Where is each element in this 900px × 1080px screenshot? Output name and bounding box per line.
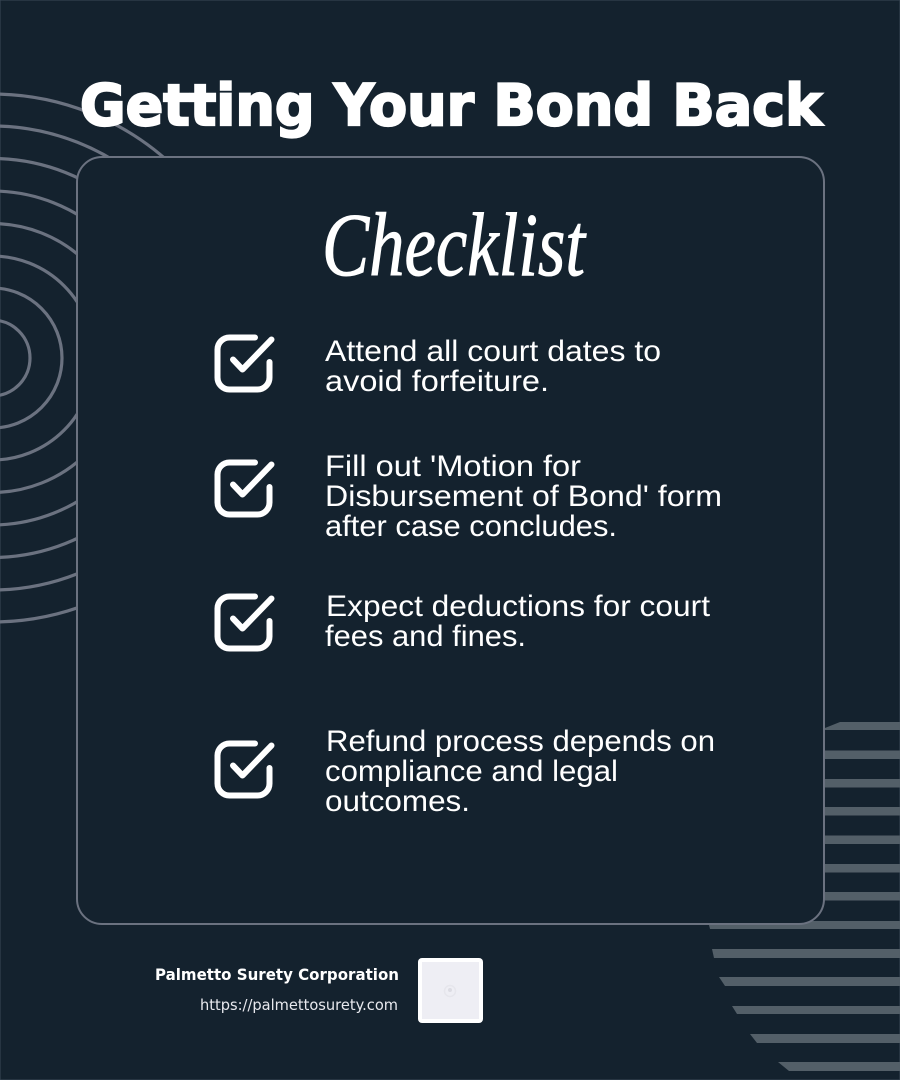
text: item 3 [325,590,711,653]
checklist item 4 [218,725,715,818]
decorative concentric arcs [0,94,256,622]
title: Getting Your Bond Back [80,73,823,139]
icon: checkbox 3 [218,596,272,648]
icon: checkbox 2 [218,462,272,514]
icon: checkbox 4 [218,744,272,796]
text: item 2: Disbursement of Bond' form [325,480,722,513]
decorative stripes [708,722,900,1071]
checklist item 2 [218,450,722,543]
text: item 3: Expect deductions for court [326,590,711,623]
checklist item 3 [218,590,711,653]
checklist item 1 [218,335,661,398]
text: item 4 [325,725,715,818]
text: item 1: avoid forfeiture. [325,365,549,398]
text: item 4: Refund process depends on [326,725,715,758]
footer: company name: Palmetto Surety Corporation [155,965,399,984]
text: item 2: Fill out 'Motion for [325,450,581,483]
icon: company logo [418,958,483,1023]
text: item 2: after case concludes. [325,510,617,543]
text: item 1: Attend all court dates to [325,335,661,368]
text: item 2 [325,450,722,543]
text: item 4: outcomes. [325,785,470,818]
text: item 4: compliance and legal [325,755,618,788]
icon: checkbox 1 [218,338,272,390]
text: item 1 [325,335,661,398]
footer: website url: https://palmettosurety.com [200,996,398,1014]
text: item 3: fees and fines. [325,620,526,653]
heading: Checklist: Checklist [322,196,587,295]
panel: checklist card [77,157,824,924]
